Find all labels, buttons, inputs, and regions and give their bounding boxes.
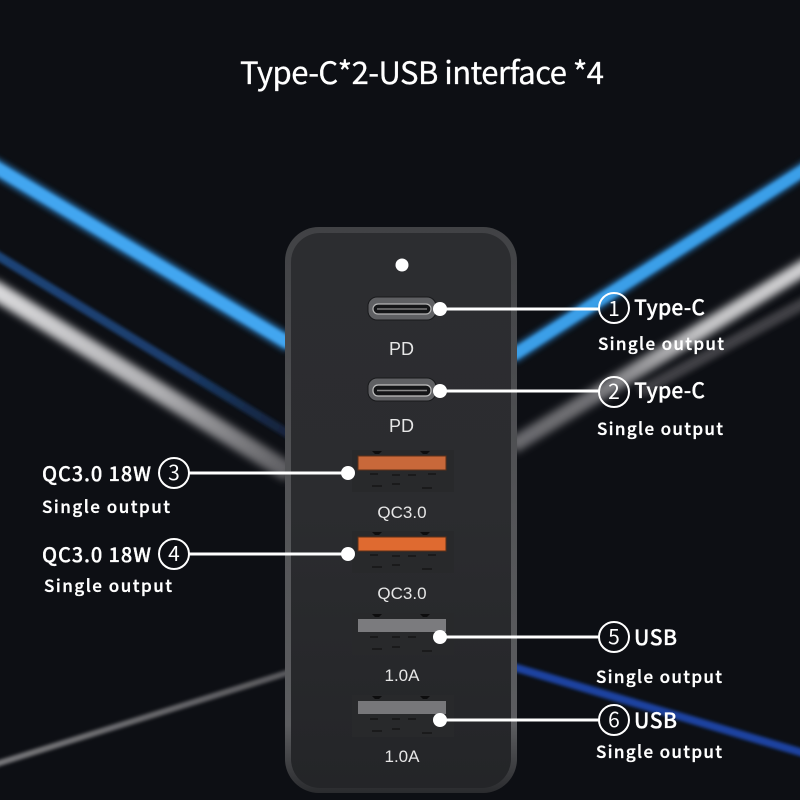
device body xyxy=(285,227,517,793)
callout 2: Type-C xyxy=(433,375,723,440)
label: PD: PD xyxy=(389,339,414,359)
label: QC3.0: QC3.0 xyxy=(377,503,427,522)
callout 3: QC3.0 18W: 3 xyxy=(168,457,180,487)
callout 1: Type-C: 1 xyxy=(608,293,620,323)
callout 3: QC3.0 18W: QC3.0 18W xyxy=(42,458,151,487)
USB-A port 1.0A bottom xyxy=(352,695,454,737)
callout 5: USB: 5 xyxy=(608,621,620,651)
USB-A port QC3.0 top xyxy=(352,450,454,492)
label: 1.0A: 1.0A xyxy=(385,747,420,766)
light beams xyxy=(0,164,800,766)
callout 2: Type-C: 2 xyxy=(608,376,620,406)
callout 6: USB: 6 xyxy=(608,704,620,734)
callout 1: Type-C: Type-C xyxy=(634,292,705,322)
callout 5: USB xyxy=(433,621,722,688)
indicator light xyxy=(396,258,408,272)
callout 4: QC3.0 18W xyxy=(42,538,355,597)
label: PD: PD xyxy=(389,416,414,436)
USB-C port 1 xyxy=(368,297,436,320)
title: Type-C*2-USB interface *4 xyxy=(240,48,604,93)
callout 5: USB: Single output xyxy=(596,663,722,688)
callout 2: Type-C: Single output xyxy=(597,415,723,440)
USB-A port QC3.0 bottom xyxy=(352,531,454,573)
label: 1.0A: 1.0A xyxy=(385,666,420,685)
callout 6: USB: USB xyxy=(634,705,677,735)
callout 2: Type-C: Type-C xyxy=(634,375,705,405)
callout 5: USB: USB xyxy=(634,622,677,652)
callout 6: USB xyxy=(433,704,722,763)
callout 6: USB: Single output xyxy=(596,738,722,763)
label: QC3.0: QC3.0 xyxy=(377,584,427,603)
callout 3: QC3.0 18W: Single output xyxy=(42,493,170,518)
callout 1: Type-C xyxy=(433,292,724,355)
callout 4: QC3.0 18W: 4 xyxy=(168,538,180,568)
callout 4: QC3.0 18W: QC3.0 18W xyxy=(42,539,151,568)
USB-C port 2 xyxy=(368,378,436,401)
callout 3: QC3.0 18W xyxy=(42,457,355,518)
callout 1: Type-C: Single output xyxy=(598,330,724,355)
callout 4: QC3.0 18W: Single output xyxy=(44,572,172,597)
charger device xyxy=(285,227,517,793)
USB-A port 1.0A top xyxy=(352,613,454,655)
